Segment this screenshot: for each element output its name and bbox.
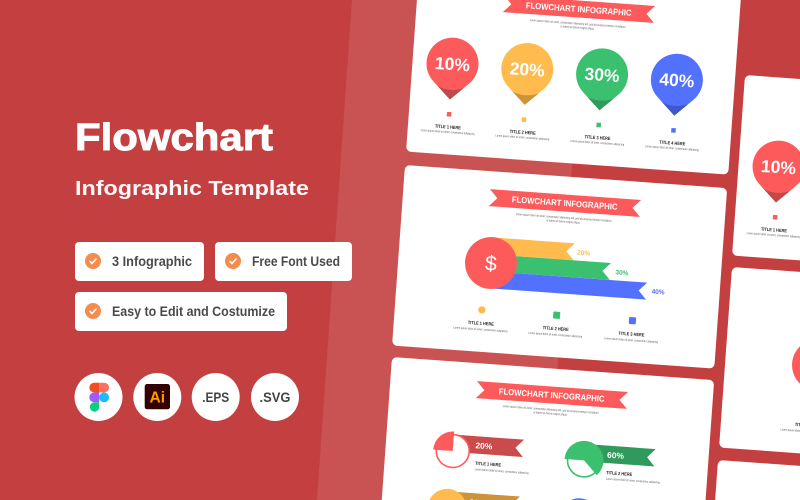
pin 20%: Lorem ipsum dolor sit amet, consectetur adipiscing [495, 133, 550, 141]
pie item 30% [426, 487, 520, 500]
pie item 60%: Lorem ipsum dolor sit amet, consectetur adipiscing [606, 477, 660, 484]
icon: Adobe Illustrator [133, 373, 181, 421]
pin 10% [747, 139, 800, 239]
intro text: ut labore et dolore magna aliqua. [560, 24, 595, 31]
item 1: Lorem ipsum dolor sit amet, consectetur adipiscing [453, 325, 508, 333]
panel: right slide pin [732, 75, 800, 279]
pin 20% [495, 41, 556, 141]
chart: stacked arrow bars: 30% [615, 269, 629, 277]
banner [476, 381, 628, 409]
intro text: Lorem ipsum dolor sit amet, consectetur adipiscing elit, sed do eiusmod tempor incididunt [516, 212, 612, 223]
title: Flowchart [75, 117, 273, 159]
pie item 20%: Lorem ipsum dolor sit amet, consectetur adipiscing [475, 467, 529, 475]
item title [780, 421, 800, 435]
banner: FLOWCHART INFOGRAPHIC [498, 386, 605, 404]
panel: right slide bottom [705, 460, 800, 500]
feature pill: Easy to Edit and Costumize [75, 292, 287, 331]
pin 40%: 40% [659, 69, 695, 91]
icon: Figma [74, 373, 122, 421]
item 3 [604, 315, 660, 344]
feature pill: Free Font Used [215, 242, 352, 281]
icon: EPS format [192, 373, 240, 421]
pin 10%: 10% [760, 156, 797, 178]
subtitle: Infographic Template [75, 178, 309, 200]
pie item 20%: 20% [475, 441, 493, 451]
pin 10%: Lorem ipsum dolor sit amet, consectetur adipiscing [420, 128, 475, 136]
intro text: Lorem ipsum dolor sit amet, consectetur adipiscing elit, sed do eiusmod tempor incididunt [530, 18, 626, 29]
chart: stacked arrow bars: 20% [577, 250, 590, 257]
pie item 40% [558, 497, 652, 500]
panel: slide 1 percent pins [406, 0, 741, 175]
pie item 60% [563, 440, 663, 484]
item 1 [453, 304, 509, 333]
pin 10%: 10% [434, 53, 471, 75]
pin 30%: TITLE 3 HERE [584, 134, 611, 141]
chart: stacked arrow bars: 40% [651, 288, 665, 296]
item 1: TITLE 1 HERE [468, 320, 494, 327]
feature pill: 3 Infographic: 3 Infographic [112, 254, 192, 269]
pin 10%: TITLE 1 HERE [761, 227, 787, 233]
chart: stacked arrow bars: $ [484, 252, 498, 276]
pin 40%: Lorem ipsum dolor sit amet, consectetur adipiscing [645, 144, 699, 152]
pin 20%: TITLE 2 HERE [510, 129, 536, 136]
item 2: Lorem ipsum dolor sit amet, consectetur adipiscing [528, 331, 583, 339]
feature pill: 3 Infographic [75, 242, 204, 281]
panel: slide 3 pie ribbons [379, 357, 714, 500]
pin 30%: 30% [584, 64, 621, 86]
icon: Adobe Illustrator: Ai [150, 390, 165, 406]
intro text: Lorem ipsum dolor sit amet, consectetur adipiscing elit, sed do eiusmod tempor incididunt [503, 404, 599, 415]
item 3: TITLE 3 HERE [618, 331, 645, 338]
pin 20%: 20% [509, 58, 546, 81]
banner: FLOWCHART INFOGRAPHIC [525, 0, 632, 18]
banner: FLOWCHART INFOGRAPHIC [511, 194, 618, 212]
pie item 20% [432, 430, 531, 475]
banner [503, 0, 655, 23]
item 3: Lorem ipsum dolor sit amet, consectetur adipiscing [604, 336, 658, 344]
item 2: TITLE 2 HERE [543, 325, 569, 332]
icon: SVG format: .SVG [260, 389, 291, 405]
pin 40%: TITLE 4 HERE [659, 140, 685, 146]
panel: slide 2 stacked arrows [392, 165, 727, 369]
pie item 20%: TITLE 1 HERE [475, 461, 501, 468]
icon: EPS format: .EPS [202, 389, 229, 405]
panel: right slide arrows [719, 267, 800, 471]
intro text: ut labore et dolore magna aliqua. [533, 410, 568, 417]
pin 10%: TITLE 1 HERE [435, 124, 461, 130]
pin 10% [420, 36, 482, 136]
intro text: ut labore et dolore magna aliqua. [546, 218, 581, 225]
pie item 60%: 60% [607, 451, 625, 461]
banner [489, 189, 641, 217]
icon: SVG format [251, 373, 299, 421]
pie item 60%: TITLE 2 HERE [606, 470, 632, 477]
feature pill: Free Font Used: Free Font Used [252, 254, 340, 269]
item 2 [528, 310, 584, 339]
pin 30%: Lorem ipsum dolor sit amet, consectetur adipiscing [570, 139, 625, 147]
pin 40% [645, 52, 706, 152]
dollar circle [790, 337, 800, 393]
pin 30% [570, 47, 631, 147]
feature pill: Easy to Edit and Costumize: Easy to Edit and Costumize [112, 304, 275, 319]
chart: stacked arrow bars [463, 235, 668, 301]
